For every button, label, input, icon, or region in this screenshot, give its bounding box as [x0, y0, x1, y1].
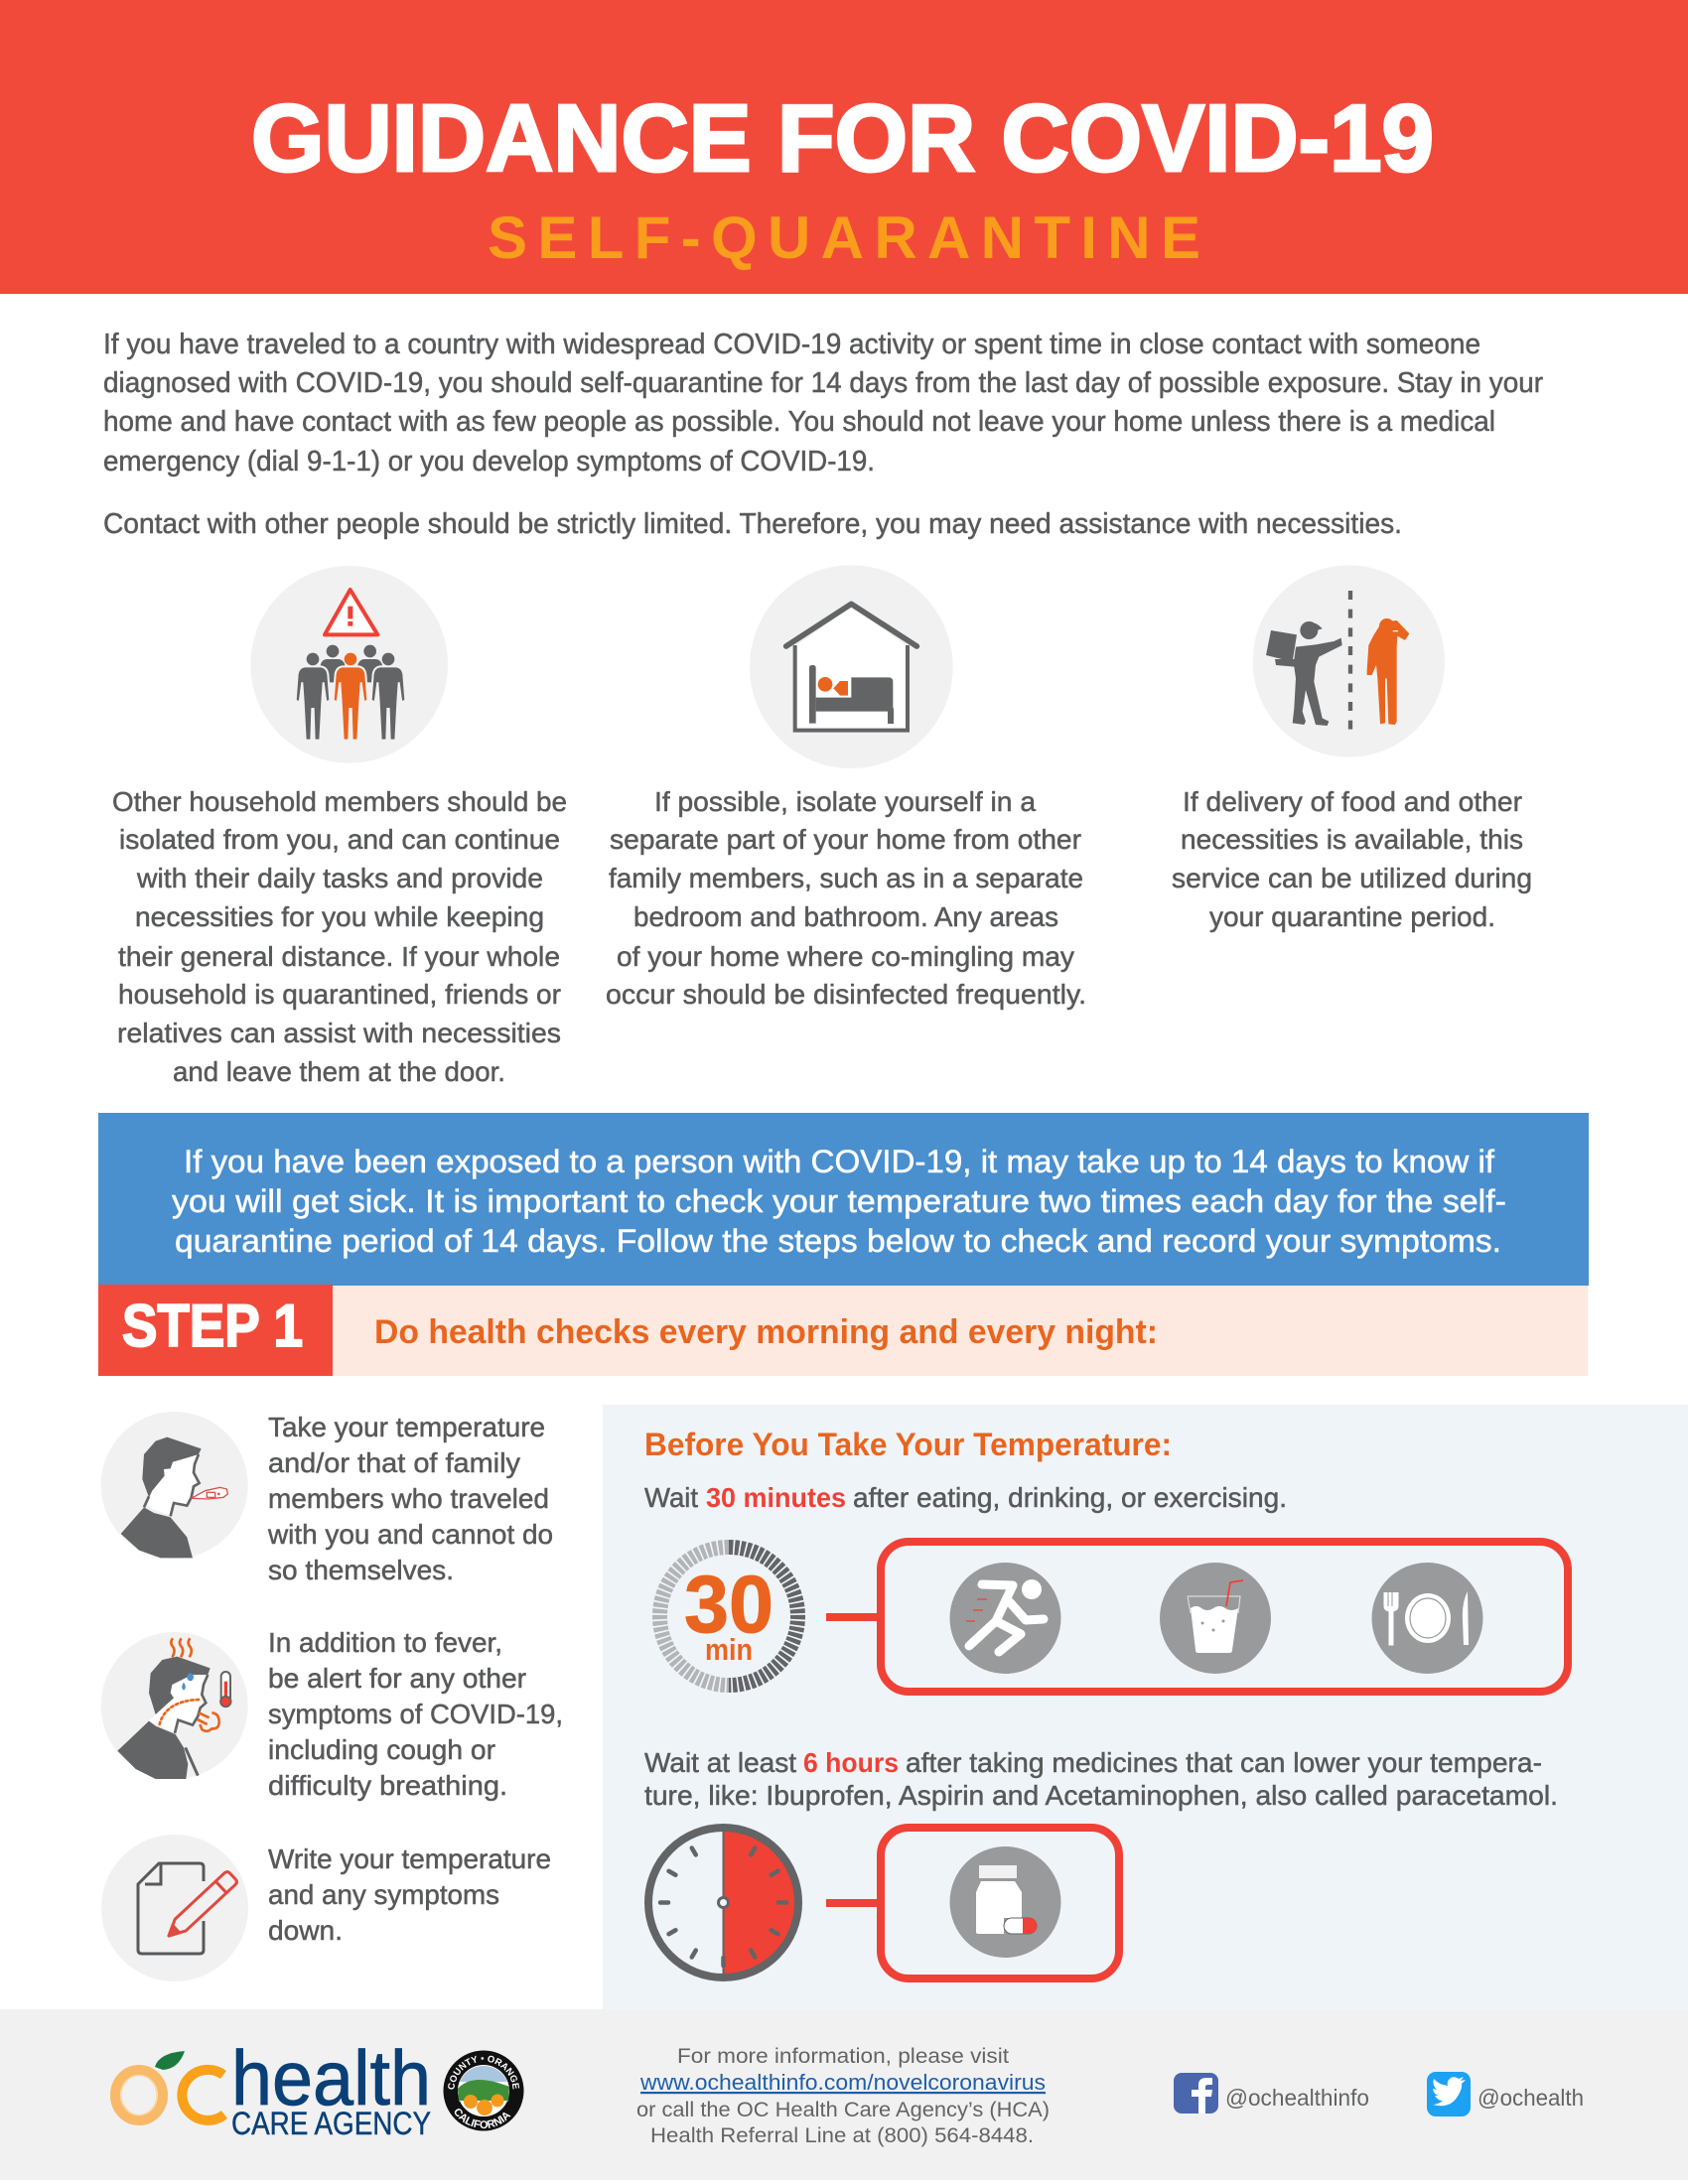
text: other symptoms: be alert for any other — [268, 1663, 526, 1694]
icon: 30 minute timer: min — [705, 1632, 753, 1667]
text: isolate yourself — [606, 786, 1086, 1010]
text: delivery: If delivery of food and other — [1183, 786, 1522, 817]
text: delivery: necessities is available, this — [1181, 824, 1523, 855]
text: household members: household is quarantined, friends or — [118, 979, 561, 1010]
panel: before you take your temperature — [603, 1405, 1688, 2009]
text: delivery: service can be utilized during — [1172, 863, 1532, 893]
icon: 30 minute timer — [659, 1547, 798, 1686]
facebook handle: @ochealthinfo — [1225, 2085, 1369, 2111]
contact information: www.ochealthinfo.com/novelcoronavirus — [639, 2070, 1046, 2095]
logo: OC Health Care Agency: health — [231, 2034, 431, 2121]
text: take temperature: and/or that of family — [268, 1447, 520, 1478]
text: take temperature: members who traveled — [268, 1483, 549, 1514]
icon: house with bed — [750, 565, 953, 768]
icon: medicine bottle — [949, 1846, 1060, 1958]
title: GUIDANCE FOR COVID-19 — [251, 85, 1434, 192]
text: write it down: Write your temperature — [268, 1843, 551, 1874]
text: take temperature: so themselves. — [268, 1555, 454, 1585]
intro paragraph: home and have contact with as few people as possible. You should not leave your home unless there is a medical — [103, 406, 1495, 438]
twitter handle — [1427, 2072, 1584, 2116]
text: write it down: down. — [268, 1915, 343, 1946]
text: household members: Other household members should be — [112, 786, 567, 817]
icon: 30 minute timer: 30 — [684, 1560, 774, 1650]
icon: 6 hour clock — [648, 1828, 798, 1978]
text: isolate yourself: separate part of your home from other — [610, 824, 1081, 855]
wait 6 hours text — [644, 1747, 1558, 1811]
text: write it down — [268, 1843, 551, 1946]
text: household members: with their daily tasks and provide — [136, 863, 543, 893]
text: isolate yourself: occur should be disinfected frequently. — [606, 979, 1086, 1010]
text: household members: necessities for you while keeping — [135, 901, 544, 932]
wait 6 hours text: Wait at least — [644, 1747, 796, 1778]
text: isolate yourself: of your home where co-mingling may — [617, 941, 1074, 972]
blue callout banner — [98, 1113, 1589, 1286]
text: isolate yourself: family members, such as in a separate — [609, 863, 1083, 893]
contact information: For more information, please visit — [677, 2045, 1009, 2068]
panel heading: Before You Take Your Temperature: — [644, 1427, 1172, 1462]
text: other symptoms: symptoms of COVID-19, — [268, 1699, 563, 1729]
text: other symptoms — [268, 1627, 563, 1801]
red box: medicine — [881, 1828, 1119, 1979]
text: delivery: your quarantine period. — [1209, 901, 1495, 932]
text: take temperature — [267, 1412, 553, 1585]
connector line — [826, 1899, 878, 1907]
text: other symptoms: difficulty breathing. — [268, 1770, 507, 1801]
wait 30 minutes text: after eating, drinking, or exercising. — [853, 1482, 1287, 1513]
blue callout banner: you will get sick. It is important to check your temperature two times each day for the self- — [172, 1183, 1506, 1219]
text: household members: relatives can assist with necessities — [117, 1018, 561, 1048]
text: other symptoms: In addition to fever, — [268, 1627, 502, 1658]
wait 6 hours text: ture, like: Ibuprofen, Aspirin and Acetaminophen, also called paracetamol. — [644, 1780, 1558, 1811]
text: household members: isolated from you, and can continue — [119, 824, 560, 855]
wait 6 hours text: 6 hours — [803, 1747, 899, 1778]
text: write it down: and any symptoms — [268, 1879, 499, 1910]
icon: man taking temperature — [101, 1412, 248, 1559]
text: take temperature: with you and cannot do — [267, 1519, 553, 1550]
text: delivery — [1172, 786, 1532, 932]
icon: document and pencil — [101, 1835, 248, 1981]
wait 30 minutes text: 30 minutes — [706, 1482, 846, 1513]
subtitle: SELF-QUARANTINE — [488, 205, 1200, 271]
text: household members — [112, 786, 567, 1087]
icon: running — [949, 1563, 1060, 1674]
footer — [0, 2009, 1688, 2180]
intro paragraph: emergency (dial 9-1-1) or you develop symptoms of COVID-19. — [103, 446, 875, 478]
header banner — [0, 0, 1688, 294]
blue callout banner: If you have been exposed to a person with COVID-19, it may take up to 14 days to know if — [184, 1144, 1494, 1179]
wait 6 hours text: after taking medicines that can lower your tempera- — [906, 1747, 1542, 1778]
connector line — [826, 1613, 878, 1621]
county seal — [443, 2051, 524, 2130]
icon: household group with warning — [250, 566, 448, 763]
icon: drink — [1160, 1563, 1271, 1674]
intro paragraph — [103, 329, 1543, 478]
logo: OC Health Care Agency: CARE AGENCY — [231, 2106, 431, 2141]
text: take temperature: Take your temperature — [268, 1412, 545, 1442]
contact information — [636, 2045, 1050, 2147]
county seal: CALIFORNIA — [455, 2109, 510, 2128]
text: household members: and leave them at the door. — [173, 1056, 505, 1087]
wait 30 minutes text: Wait — [644, 1482, 698, 1513]
text: household members: their general distance. If your whole — [118, 941, 560, 972]
contact information: or call the OC Health Care Agency’s (HCA) — [636, 2099, 1050, 2121]
blue callout banner: quarantine period of 14 days. Follow the steps below to check and record your symptoms. — [175, 1223, 1501, 1259]
twitter handle: @ochealth — [1477, 2085, 1584, 2111]
step 1 bar — [98, 1285, 1588, 1376]
text: other symptoms: including cough or — [268, 1734, 495, 1765]
icon: man with fever and cough — [101, 1632, 248, 1779]
wait 30 minutes text — [644, 1482, 1287, 1513]
icon: delivery person at distance — [1253, 565, 1445, 757]
contact information: Health Referral Line at (800) 564-8448. — [650, 2124, 1034, 2147]
logo: OC Health Care Agency — [115, 2034, 431, 2141]
step heading: Do health checks every morning and every night: — [374, 1313, 1158, 1351]
facebook handle — [1174, 2073, 1369, 2114]
contact sentence: Contact with other people should be strictly limited. Therefore, you may need assistance with necessities. — [103, 508, 1402, 540]
text: isolate yourself: If possible, isolate yourself in a — [654, 786, 1036, 817]
intro paragraph: If you have traveled to a country with widespread COVID-19 activity or spent time in close contact with someone — [103, 329, 1480, 360]
text: isolate yourself: bedroom and bathroom. Any areas — [633, 901, 1058, 932]
icon: plate and cutlery — [1372, 1563, 1483, 1674]
red box: activities — [881, 1542, 1568, 1692]
intro paragraph: diagnosed with COVID-19, you should self-quarantine for 14 days from the last day of possible exposure. Stay in your — [103, 367, 1543, 399]
step label: STEP 1 — [122, 1293, 303, 1359]
county seal: COUNTY • ORANGE — [448, 2055, 520, 2090]
